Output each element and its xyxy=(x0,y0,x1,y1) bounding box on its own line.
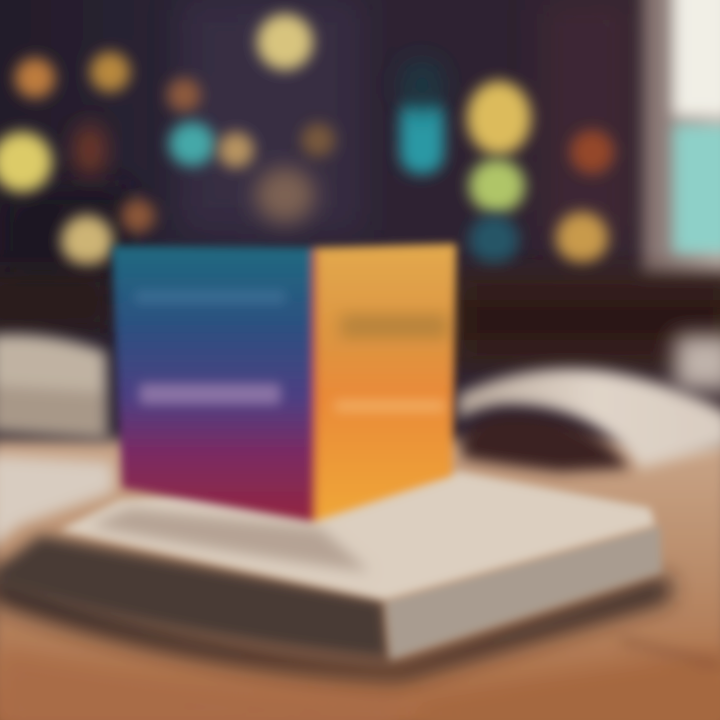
cube left face xyxy=(112,246,315,522)
bokeh: cream lower left xyxy=(61,215,113,267)
bokeh: pale yellow top xyxy=(257,14,313,70)
bokeh: red-brown xyxy=(74,124,106,176)
bokeh: orange lower xyxy=(121,199,155,233)
left foreground cloth xyxy=(0,455,114,550)
bokeh: dim orange xyxy=(167,78,201,112)
bokeh: green xyxy=(469,159,525,213)
white object at right edge xyxy=(675,335,720,390)
right background open book xyxy=(458,335,720,472)
shadow on book top xyxy=(90,508,370,572)
table: wood surface xyxy=(0,440,720,720)
bokeh: navy column xyxy=(400,60,444,110)
book page edge right xyxy=(385,525,662,660)
bokeh: blue under green xyxy=(469,215,519,265)
bokeh: teal xyxy=(169,122,215,166)
cube centre edge xyxy=(314,250,315,520)
left face light band xyxy=(140,384,280,404)
left background book xyxy=(0,334,108,440)
right face dark band xyxy=(340,314,448,338)
left face upper text band xyxy=(135,290,285,304)
bokeh: peach xyxy=(218,132,254,168)
bokeh: red-orange right xyxy=(570,130,614,174)
bokeh: yellow left xyxy=(0,132,52,192)
bokeh: orange top left xyxy=(15,58,55,98)
base book under the cube xyxy=(0,472,670,680)
open book page xyxy=(458,369,720,468)
cube xyxy=(112,244,456,522)
bokeh: amber top left xyxy=(90,52,130,92)
cube right face xyxy=(314,244,456,522)
window on the right xyxy=(642,0,720,280)
book shadow xyxy=(0,570,670,680)
book top xyxy=(60,472,655,600)
bokeh: amber centre xyxy=(301,123,335,157)
dark shelf band xyxy=(0,272,720,367)
bokeh: teal column xyxy=(400,98,444,174)
bokeh: yellow column xyxy=(467,81,531,155)
book cover lower edge xyxy=(0,535,390,660)
open book shadow xyxy=(462,416,630,472)
right face pale band xyxy=(335,400,445,412)
bokeh: brown above cube xyxy=(255,167,315,223)
bokeh lights xyxy=(0,14,614,267)
bokeh: amber right xyxy=(556,212,608,264)
